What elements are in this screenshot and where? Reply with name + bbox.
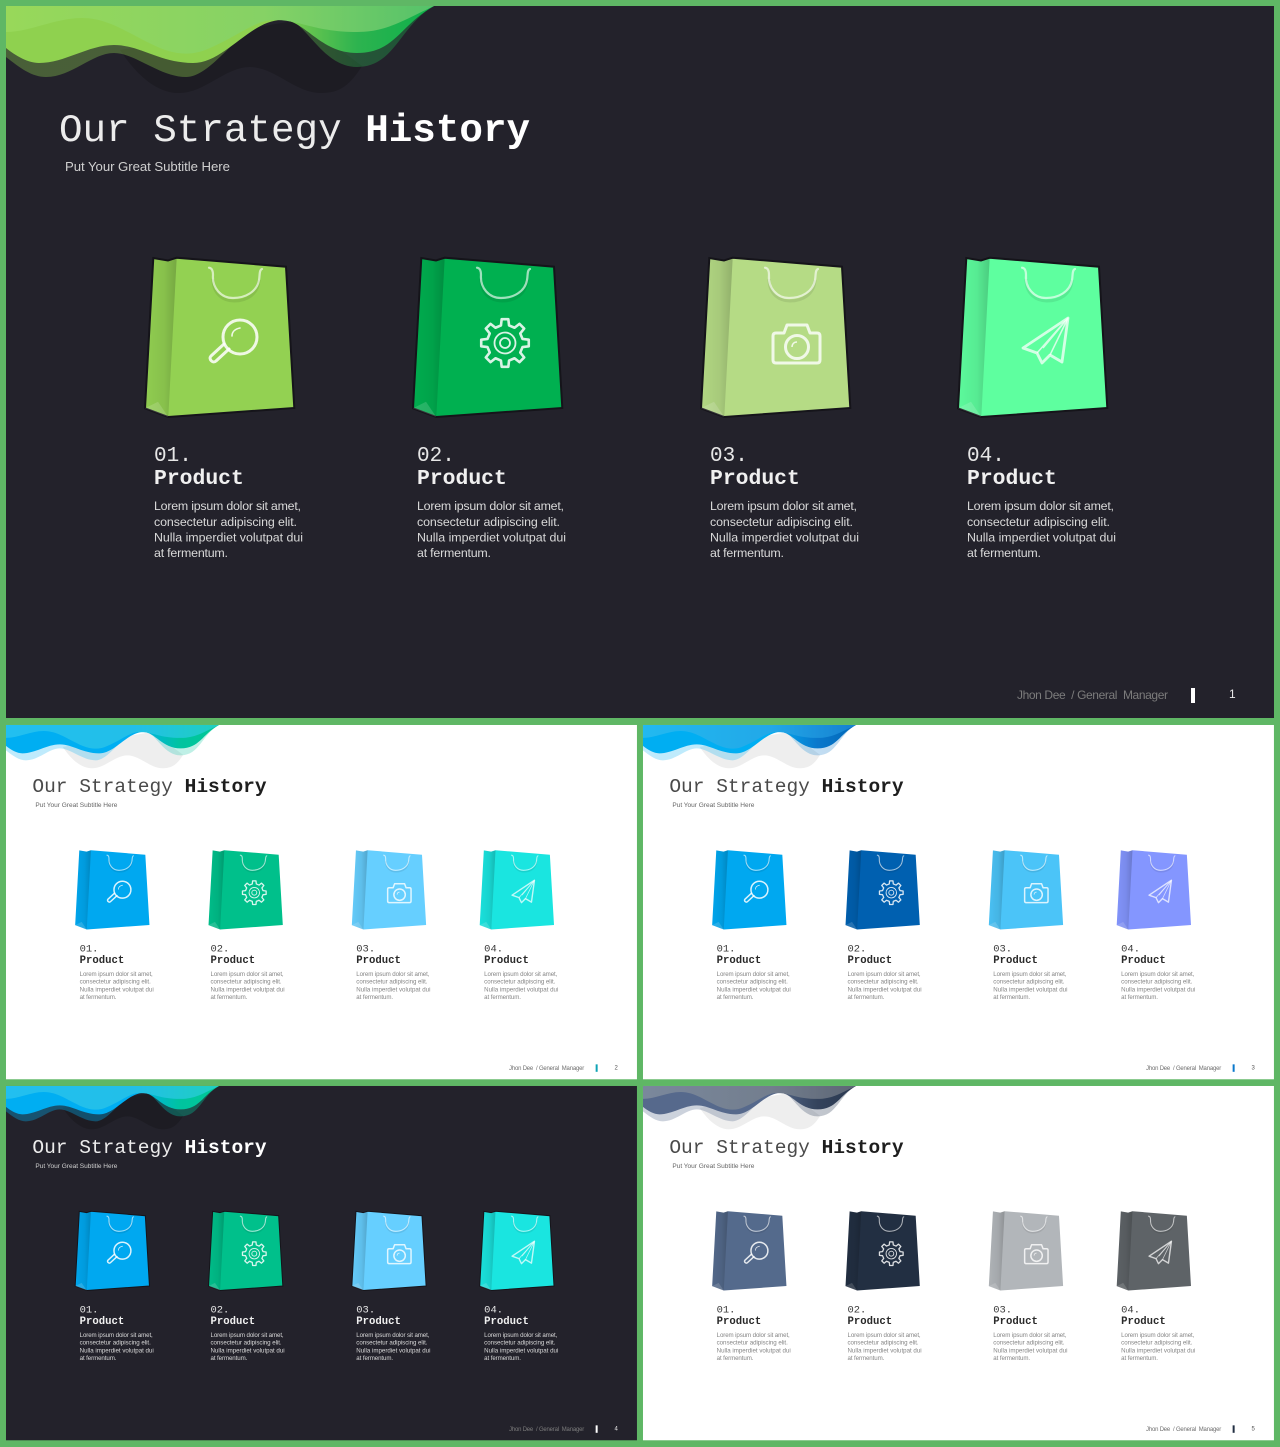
product 3 text bbox=[993, 943, 1067, 1001]
bag 4 with paper plane icon bbox=[480, 850, 554, 929]
slide 4 wave header bbox=[6, 1086, 219, 1129]
product 4 text: 04. bbox=[967, 445, 1005, 468]
product 2 text: Lorem ipsum dolor sit amet, bbox=[417, 499, 564, 513]
product 3 text: 03. bbox=[710, 445, 748, 468]
slide 3 footer: Jhon Dee / General Manager bbox=[1146, 1066, 1221, 1072]
product 1 text: Product bbox=[80, 955, 124, 967]
product 4 text: at fermentum. bbox=[484, 1355, 521, 1362]
product 4 text bbox=[1121, 943, 1195, 1001]
bag 4 with paper plane icon bbox=[958, 258, 1107, 417]
product 1 text: consectetur adipiscing elit. bbox=[80, 979, 151, 986]
slide 4 subtitle: Put Your Great Subtitle Here bbox=[35, 1163, 118, 1170]
product 3 text: at fermentum. bbox=[356, 1355, 393, 1362]
product 2 text: Lorem ipsum dolor sit amet, bbox=[847, 971, 921, 978]
slide 2 background panel bbox=[6, 725, 637, 1079]
product 4 text bbox=[484, 1304, 558, 1362]
slide 3 title: Our Strategy History bbox=[669, 776, 904, 798]
product 2 text: consectetur adipiscing elit. bbox=[211, 1340, 282, 1347]
product 2 text: Product bbox=[847, 955, 892, 967]
bag 1 with magnifier icon bbox=[145, 258, 294, 417]
product 3 text: consectetur adipiscing elit. bbox=[356, 1340, 428, 1347]
product 2 text: Nulla imperdiet volutpat dui bbox=[847, 986, 922, 993]
product 3 text: Nulla imperdiet volutpat dui bbox=[356, 1347, 430, 1354]
product 1 text bbox=[80, 1304, 154, 1362]
product 1 text: consectetur adipiscing elit. bbox=[80, 1340, 151, 1347]
product 1 text: 01. bbox=[80, 943, 98, 955]
product 3 text bbox=[356, 1304, 430, 1362]
bag 2 with gear icon bbox=[846, 1211, 920, 1290]
product 4 text: consectetur adipiscing elit. bbox=[484, 979, 556, 986]
product 3 text: consectetur adipiscing elit. bbox=[993, 979, 1065, 986]
product 2 text: consectetur adipiscing elit. bbox=[847, 1340, 919, 1347]
bag 4 with paper plane icon bbox=[1117, 850, 1191, 929]
product 1 text: Lorem ipsum dolor sit amet, bbox=[154, 499, 301, 513]
product 4 text: Nulla imperdiet volutpat dui bbox=[967, 530, 1116, 544]
product 3 text: Lorem ipsum dolor sit amet, bbox=[356, 971, 430, 978]
product 1 text bbox=[154, 445, 303, 560]
product 2 text: 02. bbox=[417, 445, 455, 468]
slide 1 subtitle: Put Your Great Subtitle Here bbox=[65, 159, 230, 174]
product 2 text: Nulla imperdiet volutpat dui bbox=[417, 530, 566, 544]
product 2 text: consectetur adipiscing elit. bbox=[211, 979, 282, 986]
bag 1 with magnifier icon bbox=[75, 850, 149, 929]
product 3 text bbox=[710, 445, 859, 560]
product 4 text: at fermentum. bbox=[1121, 1355, 1158, 1362]
slide 5: white slate-grey theme bbox=[643, 1086, 1274, 1440]
product 1 text bbox=[80, 943, 154, 1001]
product 4 text: 04. bbox=[484, 943, 503, 955]
product 3 text: Lorem ipsum dolor sit amet, bbox=[710, 499, 857, 513]
slide 4 footer: 4 bbox=[615, 1426, 619, 1432]
product 3 text: Product bbox=[993, 1316, 1038, 1328]
product 2 text: Lorem ipsum dolor sit amet, bbox=[847, 1332, 921, 1339]
product 3 text: Nulla imperdiet volutpat dui bbox=[710, 530, 859, 544]
product 4 text: at fermentum. bbox=[484, 994, 521, 1001]
bag 4 with paper plane icon bbox=[480, 1211, 554, 1290]
product 4 text: Lorem ipsum dolor sit amet, bbox=[484, 971, 558, 978]
slide 1 footer: 1 bbox=[1229, 687, 1236, 701]
bag 1 with magnifier icon bbox=[712, 850, 786, 929]
slide 1 wave header bbox=[6, 6, 434, 93]
product 1 text: Lorem ipsum dolor sit amet, bbox=[717, 971, 790, 978]
product 2 text: at fermentum. bbox=[847, 1355, 885, 1362]
product 4 text: consectetur adipiscing elit. bbox=[967, 515, 1110, 529]
slide 4 background panel bbox=[6, 1086, 637, 1440]
product 2 text: Product bbox=[211, 955, 255, 967]
product 3 text: at fermentum. bbox=[710, 546, 784, 560]
slide 3: white blue-navy theme bbox=[643, 725, 1274, 1079]
bag 3 with camera icon bbox=[989, 850, 1063, 929]
product 1 text: at fermentum. bbox=[717, 1355, 754, 1362]
slide 5 footer: Jhon Dee / General Manager bbox=[1146, 1427, 1221, 1433]
product 4 text: Nulla imperdiet volutpat dui bbox=[484, 1347, 558, 1354]
slide 2 wave header bbox=[6, 725, 219, 768]
slide 5 subtitle: Put Your Great Subtitle Here bbox=[672, 1163, 755, 1170]
product 4 text: consectetur adipiscing elit. bbox=[1121, 979, 1193, 986]
slide 4 footer: Jhon Dee / General Manager bbox=[509, 1427, 584, 1433]
product 3 text: 03. bbox=[356, 943, 375, 955]
product 4 text: Lorem ipsum dolor sit amet, bbox=[1121, 1332, 1195, 1339]
product 1 text: at fermentum. bbox=[154, 546, 228, 560]
slide 5 wave header bbox=[643, 1086, 856, 1129]
product 4 text: Product bbox=[1121, 1316, 1166, 1328]
product 2 text: Lorem ipsum dolor sit amet, bbox=[211, 1332, 284, 1339]
product 3 text bbox=[993, 1304, 1067, 1362]
slide 2 footer bbox=[509, 1064, 619, 1072]
slide 3 subtitle: Put Your Great Subtitle Here bbox=[672, 802, 755, 809]
product 4 text bbox=[484, 943, 558, 1001]
slide 5 footer: 5 bbox=[1252, 1426, 1256, 1432]
product 2 text bbox=[211, 1304, 285, 1362]
product 2 text bbox=[417, 445, 566, 560]
product 3 text: at fermentum. bbox=[356, 994, 393, 1001]
slide 4 footer bbox=[509, 1425, 619, 1433]
slide 2 subtitle: Put Your Great Subtitle Here bbox=[35, 802, 118, 809]
product 3 text: Product bbox=[993, 955, 1038, 967]
bag 3 with camera icon bbox=[989, 1211, 1063, 1290]
product 1 text: Lorem ipsum dolor sit amet, bbox=[80, 971, 153, 978]
slide 1 background panel bbox=[6, 6, 1274, 718]
product 4 text: Product bbox=[484, 955, 529, 967]
product 1 text bbox=[717, 943, 791, 1001]
slide 4 title: Our Strategy History bbox=[32, 1137, 267, 1159]
product 1 text: at fermentum. bbox=[80, 994, 117, 1001]
bag 1 with magnifier icon bbox=[712, 1211, 786, 1290]
bag 1 with magnifier icon bbox=[75, 1211, 149, 1290]
slide 2 footer: Jhon Dee / General Manager bbox=[509, 1066, 584, 1072]
bag 2 with gear icon bbox=[209, 1211, 283, 1290]
product 2 text: consectetur adipiscing elit. bbox=[417, 515, 560, 529]
product 4 text: at fermentum. bbox=[1121, 994, 1158, 1001]
product 4 text bbox=[1121, 1304, 1195, 1362]
slide 5 title: Our Strategy History bbox=[669, 1137, 904, 1159]
product 1 text: 01. bbox=[154, 445, 192, 468]
product 4 text: 04. bbox=[1121, 1304, 1140, 1316]
product 3 text: Nulla imperdiet volutpat dui bbox=[993, 986, 1067, 993]
product 3 text: Lorem ipsum dolor sit amet, bbox=[993, 971, 1067, 978]
product 2 text: 02. bbox=[211, 943, 229, 955]
product 3 text: 03. bbox=[993, 1304, 1012, 1316]
product 1 text: Product bbox=[717, 1316, 761, 1328]
product 2 text: Product bbox=[417, 467, 507, 491]
product 4 text: Lorem ipsum dolor sit amet, bbox=[1121, 971, 1195, 978]
product 1 text: Product bbox=[154, 467, 244, 491]
bag 2 with gear icon bbox=[209, 850, 283, 929]
product 3 text: Product bbox=[356, 1316, 401, 1328]
product 3 text: consectetur adipiscing elit. bbox=[993, 1340, 1065, 1347]
product 4 text: Product bbox=[967, 467, 1057, 491]
slide 1: large dark green theme bbox=[6, 6, 1274, 718]
product 2 text: 02. bbox=[847, 943, 866, 955]
product 2 text: at fermentum. bbox=[211, 994, 248, 1001]
product 1 text: 01. bbox=[80, 1304, 98, 1316]
product 1 text: Lorem ipsum dolor sit amet, bbox=[80, 1332, 153, 1339]
slide 5 footer bbox=[1146, 1425, 1256, 1433]
product 3 text: at fermentum. bbox=[993, 1355, 1030, 1362]
slide 3 background panel bbox=[643, 725, 1274, 1079]
product 3 text: Product bbox=[710, 467, 800, 491]
product 3 text: consectetur adipiscing elit. bbox=[356, 979, 428, 986]
product 2 text: consectetur adipiscing elit. bbox=[847, 979, 919, 986]
product 3 text: Nulla imperdiet volutpat dui bbox=[993, 1347, 1067, 1354]
slide 3 wave header bbox=[643, 725, 856, 768]
product 2 text: Product bbox=[211, 1316, 255, 1328]
product 4 text bbox=[967, 445, 1116, 560]
product 4 text: Nulla imperdiet volutpat dui bbox=[484, 986, 558, 993]
product 3 text: Lorem ipsum dolor sit amet, bbox=[993, 1332, 1067, 1339]
product 1 text: Nulla imperdiet volutpat dui bbox=[154, 530, 303, 544]
product 1 text: at fermentum. bbox=[80, 1355, 117, 1362]
product 4 text: 04. bbox=[1121, 943, 1140, 955]
product 2 text: 02. bbox=[211, 1304, 229, 1316]
slide 2 title: Our Strategy History bbox=[32, 776, 267, 798]
slide 1 title: Our Strategy History bbox=[59, 108, 530, 153]
slide 3 footer bbox=[1146, 1064, 1256, 1072]
product 1 text: consectetur adipiscing elit. bbox=[154, 515, 297, 529]
bag 2 with gear icon bbox=[846, 850, 920, 929]
product 3 text: at fermentum. bbox=[993, 994, 1030, 1001]
product 3 text: 03. bbox=[993, 943, 1012, 955]
product 1 text: 01. bbox=[717, 1304, 735, 1316]
bag 3 with camera icon bbox=[352, 850, 426, 929]
slide 3 footer: 3 bbox=[1252, 1065, 1256, 1071]
product 1 text: at fermentum. bbox=[717, 994, 754, 1001]
product 2 text bbox=[847, 1304, 922, 1362]
product 4 text: Product bbox=[484, 1316, 529, 1328]
slide 2 footer: 2 bbox=[615, 1065, 619, 1071]
slide 1 footer bbox=[1017, 687, 1236, 703]
bag 3 with camera icon bbox=[701, 258, 850, 417]
product 2 text: at fermentum. bbox=[847, 994, 885, 1001]
product 1 text: Lorem ipsum dolor sit amet, bbox=[717, 1332, 790, 1339]
product 1 text: Nulla imperdiet volutpat dui bbox=[717, 1347, 791, 1354]
product 3 text: consectetur adipiscing elit. bbox=[710, 515, 853, 529]
product 4 text: consectetur adipiscing elit. bbox=[1121, 1340, 1193, 1347]
product 4 text: 04. bbox=[484, 1304, 503, 1316]
product 2 text: at fermentum. bbox=[417, 546, 491, 560]
slide 2: white blue-teal theme bbox=[6, 725, 637, 1079]
product 1 text: 01. bbox=[717, 943, 735, 955]
slide 5 background panel bbox=[643, 1086, 1274, 1440]
product 4 text: Lorem ipsum dolor sit amet, bbox=[967, 499, 1114, 513]
product 2 text: at fermentum. bbox=[211, 1355, 248, 1362]
product 4 text: at fermentum. bbox=[967, 546, 1041, 560]
product 2 text: Product bbox=[847, 1316, 892, 1328]
product 2 text: Nulla imperdiet volutpat dui bbox=[211, 986, 285, 993]
product 4 text: consectetur adipiscing elit. bbox=[484, 1340, 556, 1347]
product 2 text: Nulla imperdiet volutpat dui bbox=[211, 1347, 285, 1354]
product 2 text bbox=[847, 943, 922, 1001]
product 4 text: Lorem ipsum dolor sit amet, bbox=[484, 1332, 558, 1339]
product 1 text: consectetur adipiscing elit. bbox=[717, 979, 788, 986]
bag 3 with camera icon bbox=[352, 1211, 426, 1290]
slide 1 footer: Jhon Dee / General Manager bbox=[1017, 688, 1168, 702]
product 4 text: Nulla imperdiet volutpat dui bbox=[1121, 1347, 1195, 1354]
product 1 text: Nulla imperdiet volutpat dui bbox=[717, 986, 791, 993]
slide 4: dark blue-teal theme bbox=[6, 1086, 637, 1440]
product 3 text: 03. bbox=[356, 1304, 375, 1316]
product 3 text bbox=[356, 943, 430, 1001]
product 1 text: Nulla imperdiet volutpat dui bbox=[80, 1347, 154, 1354]
product 1 text: consectetur adipiscing elit. bbox=[717, 1340, 788, 1347]
product 1 text bbox=[717, 1304, 791, 1362]
product 2 text: Lorem ipsum dolor sit amet, bbox=[211, 971, 284, 978]
product 1 text: Nulla imperdiet volutpat dui bbox=[80, 986, 154, 993]
product 2 text bbox=[211, 943, 285, 1001]
product 4 text: Product bbox=[1121, 955, 1166, 967]
product 1 text: Product bbox=[80, 1316, 124, 1328]
product 3 text: Lorem ipsum dolor sit amet, bbox=[356, 1332, 430, 1339]
product 1 text: Product bbox=[717, 955, 761, 967]
bag 2 with gear icon bbox=[413, 258, 562, 417]
product 2 text: 02. bbox=[847, 1304, 866, 1316]
product 3 text: Product bbox=[356, 955, 401, 967]
bag 4 with paper plane icon bbox=[1117, 1211, 1191, 1290]
product 4 text: Nulla imperdiet volutpat dui bbox=[1121, 986, 1195, 993]
product 2 text: Nulla imperdiet volutpat dui bbox=[847, 1347, 922, 1354]
product 3 text: Nulla imperdiet volutpat dui bbox=[356, 986, 430, 993]
